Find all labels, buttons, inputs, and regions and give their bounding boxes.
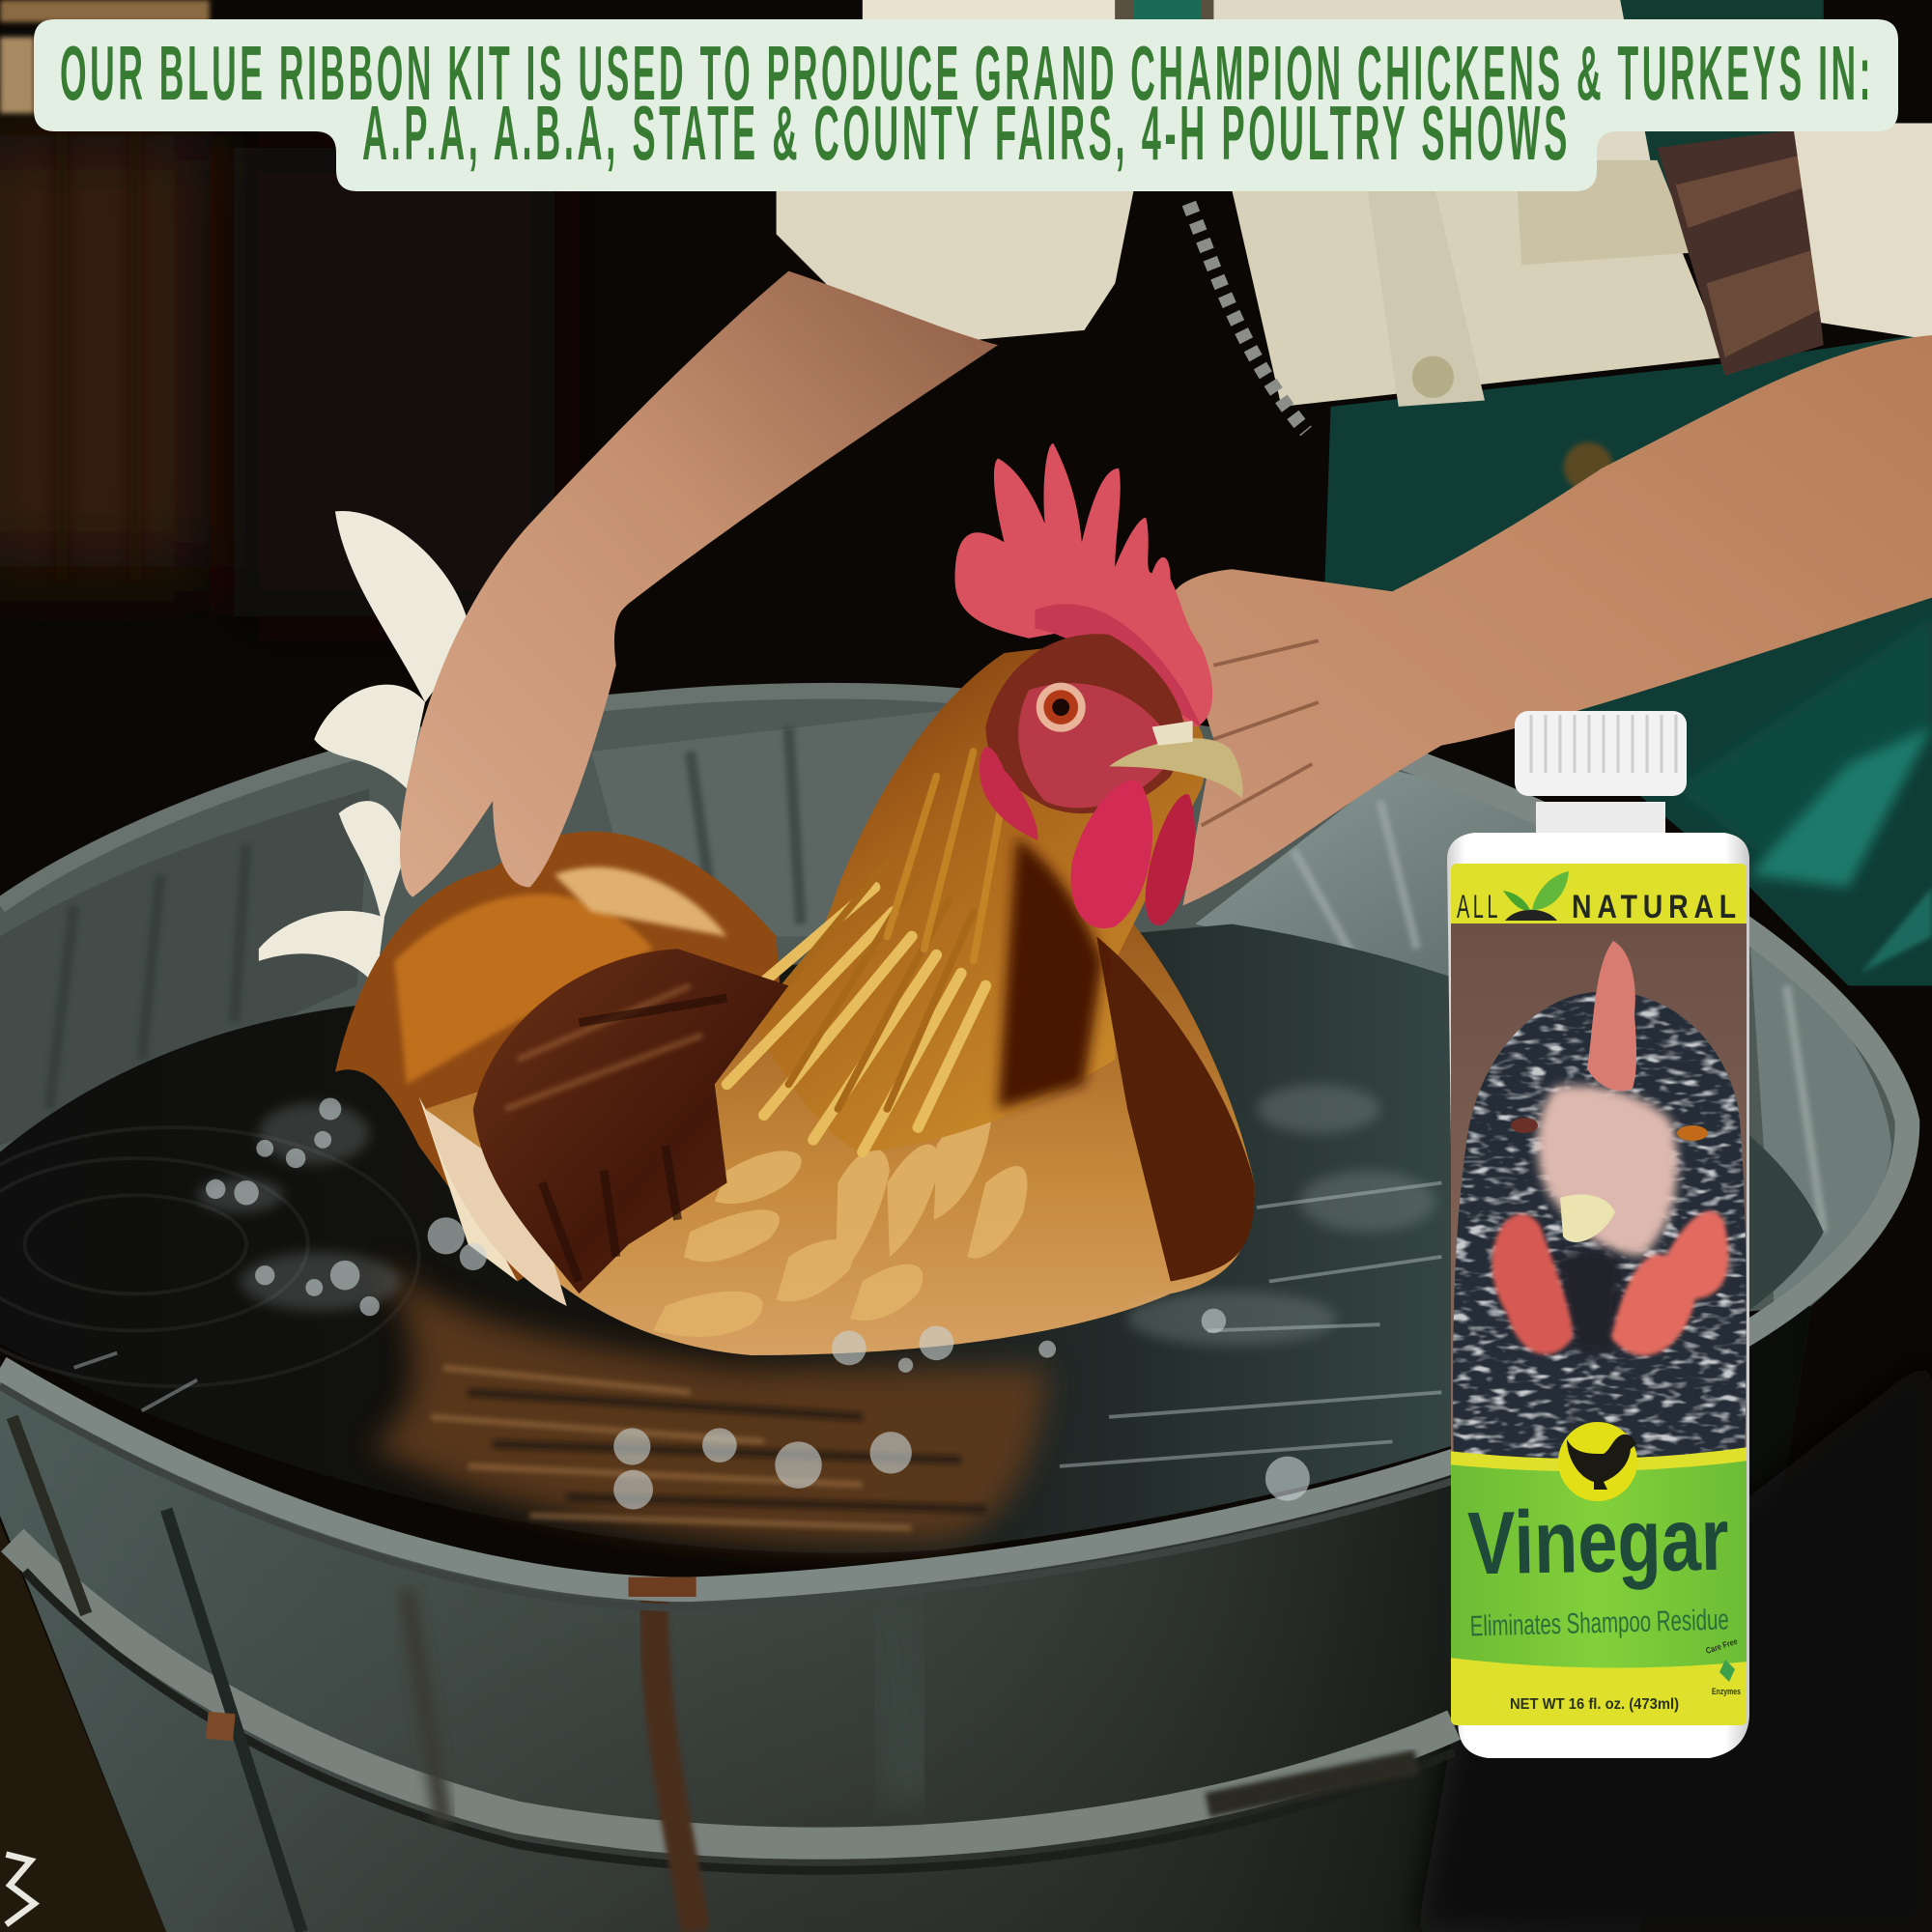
tail feathers: [259, 511, 470, 985]
care free enzymes mark: [1705, 1636, 1741, 1696]
chicken: [335, 443, 1255, 1355]
dark wing: [473, 949, 788, 1293]
banner background: [34, 19, 1898, 191]
label green panel: [1449, 1422, 1748, 1729]
head: [985, 634, 1185, 813]
tub seams and rust: [13, 1417, 1417, 1932]
chicken breast: [425, 924, 1255, 1355]
comb: [955, 443, 1212, 727]
rust patch on rim: [629, 1577, 696, 1597]
icon: hen badge: [1558, 1422, 1637, 1501]
person torso and shirt: [777, 0, 1932, 985]
bubbles: [197, 1084, 1435, 1509]
floor brand mark: [6, 1855, 35, 1924]
left arm and hand: [400, 271, 998, 897]
label hen photo: [1451, 923, 1747, 1483]
product bottle: [1447, 711, 1749, 1758]
tub outer wall: [0, 1306, 1811, 1932]
care free enzymes mark: Enzymes: [1712, 1687, 1741, 1696]
product name: Vinegar: [1467, 1491, 1729, 1593]
chicken reflection: [370, 1257, 1047, 1543]
right arm and hand: [1171, 335, 1932, 905]
headline banner: [34, 19, 1898, 191]
tub lower band: [13, 1540, 1454, 1843]
breast feather scales: [653, 1098, 1027, 1337]
water surface: [0, 924, 1824, 1553]
eye: [1037, 683, 1086, 732]
tub rim: [0, 754, 1908, 1589]
beak: [1109, 738, 1243, 799]
bottle cap: [1515, 711, 1687, 840]
wattles: [980, 747, 1195, 928]
chicken back feathers: [335, 832, 788, 1282]
tub inner wall: [0, 690, 1912, 1355]
icon: leaf sprout: [1503, 871, 1569, 921]
label: [1449, 862, 1748, 1729]
label top band: [1451, 862, 1747, 925]
label top band: NATURAL: [1572, 889, 1742, 925]
care free enzymes mark: Care Free: [1705, 1636, 1739, 1656]
metal tub: [0, 690, 1932, 1932]
tagline: Eliminates Shampoo Residue: [1469, 1604, 1729, 1642]
bottle body: [1447, 833, 1749, 1758]
neck hackles: [752, 640, 1206, 1152]
net weight: NET WT 16 fl. oz. (473ml): [1510, 1696, 1679, 1713]
label top band: ALL: [1457, 889, 1501, 925]
